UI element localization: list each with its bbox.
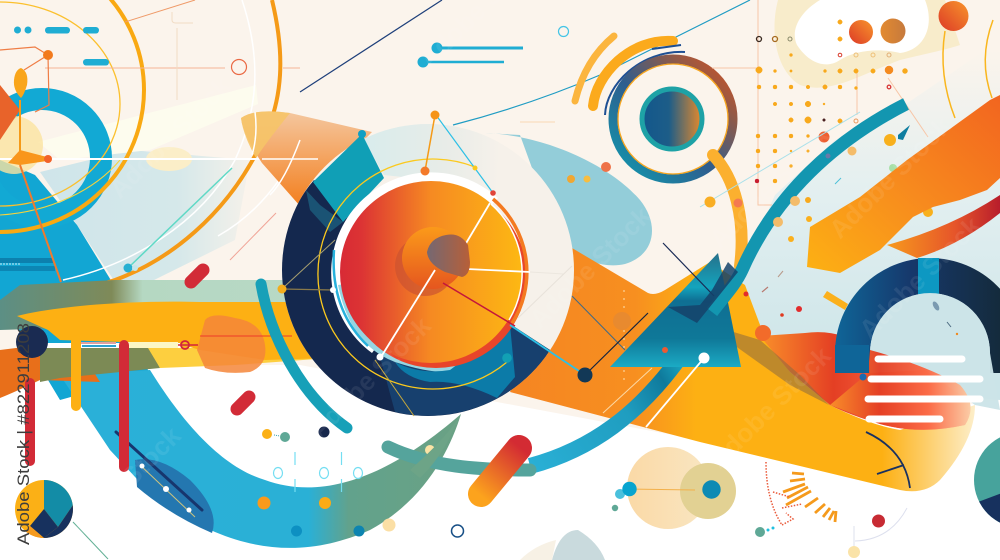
pale yellow cloud top right (774, 0, 960, 88)
red pill upper (191, 270, 203, 282)
navy overlay on triangle (668, 262, 738, 323)
pale blue crescent (338, 272, 460, 372)
vertical stock id text: Adobe Stock | #822911208 (14, 323, 33, 545)
cyan digits (274, 452, 362, 492)
light beam (113, 150, 142, 154)
watermark: Adobe Stock (103, 70, 237, 204)
white pointer line (646, 352, 710, 427)
orange gradient pill (481, 448, 519, 494)
blue shade blob (135, 459, 214, 533)
blue wave (395, 325, 515, 398)
large orange arc (107, 0, 282, 280)
teal arc (712, 104, 906, 312)
dark shadow strip (727, 330, 829, 405)
white spokes (381, 203, 572, 357)
gauge dotted arc (766, 462, 802, 525)
dark teal accent (306, 190, 343, 232)
hub (402, 227, 464, 289)
watermark: Adobe Stock (303, 310, 437, 444)
yellow tube (713, 155, 742, 266)
red orange patch over arch interior (830, 350, 970, 430)
central cream disc (282, 124, 574, 416)
shadow of hub (395, 236, 455, 296)
peach wedge (241, 111, 372, 206)
cyan dashes (14, 26, 109, 66)
teal ring sector (313, 134, 384, 222)
yellow main band (17, 302, 330, 360)
hub blob (427, 234, 470, 277)
teal navy disc right (970, 430, 1000, 530)
teal block on arch (918, 258, 939, 294)
big orange arrow shape (807, 95, 1000, 273)
long blue curve line (453, 0, 750, 125)
arch end block (835, 345, 869, 373)
pale top sector (362, 124, 500, 200)
navy blob (16, 326, 48, 358)
bottom cream blob (520, 540, 556, 560)
green node with dots (755, 526, 774, 537)
top diagonal navy line (300, 0, 442, 92)
white list bars (868, 359, 980, 419)
pale green left band (0, 280, 310, 330)
watermark: Adobe Stock (703, 120, 837, 254)
blue node (860, 374, 866, 380)
cyan line to navy node (510, 313, 648, 382)
tan circle (680, 463, 736, 519)
red dot on triangle (662, 347, 668, 353)
cyan outline circle (558, 26, 568, 36)
blue arc to triangle (530, 350, 685, 466)
bottom small dots (258, 426, 464, 537)
horizontal white line (0, 158, 260, 160)
peach line (520, 121, 555, 123)
yellow vertical bar (71, 340, 81, 406)
thin red diagonal (230, 213, 276, 260)
small cyan node and green line (124, 168, 232, 272)
pale inside arch (870, 293, 1000, 410)
pale disc (0, 116, 43, 174)
scattered dots near arc (734, 125, 933, 277)
thin cyan diagonal (700, 112, 860, 207)
panel: pale blue backdrop left (40, 150, 250, 282)
red ring outline (232, 60, 246, 74)
red pill lower (237, 397, 249, 409)
red vertical bar (119, 345, 129, 467)
white right rim (491, 204, 522, 320)
dotted line on blue blob (140, 464, 195, 517)
red dot in matrix (818, 132, 830, 142)
blue swoosh upper left (0, 160, 150, 400)
yellow wedge overlay (241, 111, 290, 158)
white arc (63, 0, 255, 280)
dot matrix (755, 20, 908, 183)
dark bars on blue (0, 258, 55, 271)
navy diagonal line (116, 432, 202, 510)
yellow under band (148, 348, 330, 368)
blue ring (0, 99, 101, 217)
peach guide lines (45, 0, 300, 100)
orange rim arc (493, 199, 527, 325)
cyan white edge (334, 250, 368, 346)
background (0, 0, 1000, 434)
orange peach left band (0, 345, 100, 398)
green tail of swoosh overlap (410, 414, 461, 478)
cyan slider bars (418, 42, 523, 68)
red dot and arc (848, 508, 907, 558)
peach blob (197, 315, 265, 373)
red left bar (25, 383, 35, 461)
navy corner marks (866, 432, 910, 488)
watermark: Adobe Stock (53, 420, 187, 554)
pale yellow cloud (146, 147, 192, 171)
orange dot on diagonal (704, 196, 716, 208)
small red connector node (178, 341, 198, 349)
gradient core disc (340, 181, 522, 363)
outer yellow arc (575, 36, 614, 101)
teal green arc (388, 447, 530, 470)
navy lower right sector (380, 325, 550, 416)
white cloud (795, 0, 929, 64)
thin yellow arc lower (0, 160, 120, 215)
navy thin arcs (605, 45, 685, 115)
red sliver (887, 195, 1000, 258)
white arc inner (218, 181, 278, 236)
navy ring sector (278, 180, 550, 421)
lower swoosh blue to green (60, 370, 461, 548)
thin lines on orange band (572, 290, 652, 413)
white bar with blue (45, 342, 180, 348)
watermark: Adobe Stock (853, 210, 987, 344)
watermark: Adobe Stock (823, 110, 957, 244)
yellow rect (823, 291, 848, 310)
peach frame lines (712, 0, 928, 205)
red line on band (200, 335, 292, 337)
dots on blue blob (567, 162, 611, 183)
olive under band (40, 348, 160, 382)
yellow thin arcs right (943, 20, 993, 118)
light blue blob (485, 133, 652, 265)
yellow thin ring (0, 2, 120, 206)
teal curved bar (261, 284, 347, 428)
thin line to triangle (663, 243, 714, 296)
teal triangle (610, 253, 741, 367)
green line from pie (73, 522, 108, 559)
connector with blue nodes (612, 480, 721, 511)
watermark: Adobe Stock (703, 340, 837, 474)
bottom grey blob (552, 530, 605, 560)
pale dot behind arc (425, 445, 435, 455)
orange balls (849, 1, 968, 44)
white cross lines on wedge (252, 112, 318, 195)
red crescent (345, 186, 527, 368)
gauge ticks (783, 473, 836, 522)
red spoke (443, 283, 515, 326)
navy arch (835, 258, 1000, 373)
network nodes top left (0, 47, 61, 282)
inner yellow arc (593, 41, 673, 106)
red orange shape (760, 332, 970, 430)
ring with eye (613, 59, 733, 179)
orange ring top left (0, 0, 144, 232)
watermark: Adobe Stock (523, 200, 657, 334)
large peach circle (627, 447, 709, 529)
faint circle on band (613, 312, 631, 330)
yellow circle arc (318, 159, 507, 389)
orange dot on band (755, 325, 771, 341)
red small dots (744, 287, 958, 335)
panel: pale blue backdrop right (742, 98, 1000, 400)
network points on disc (278, 110, 512, 416)
inner white ring (331, 172, 498, 353)
big orange yellow band (510, 248, 975, 491)
pie chart (15, 480, 73, 538)
